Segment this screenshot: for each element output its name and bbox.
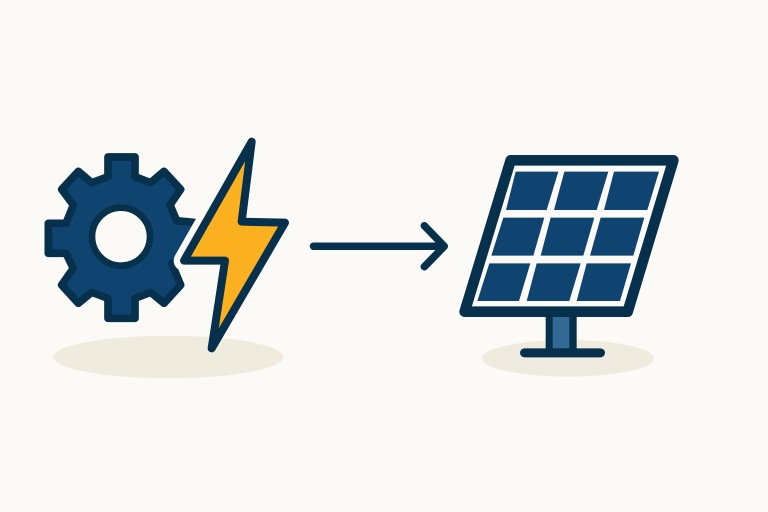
panel stand (520, 313, 605, 357)
panel cells (477, 172, 659, 301)
icon: lightning bolt (184, 142, 285, 348)
panel frame (465, 160, 673, 312)
icon: solar panel (465, 160, 673, 357)
arrow (314, 226, 444, 267)
shadow: under solar panel (482, 340, 654, 377)
shadow: under gear and bolt (54, 336, 284, 378)
icon: gear (48, 142, 285, 348)
